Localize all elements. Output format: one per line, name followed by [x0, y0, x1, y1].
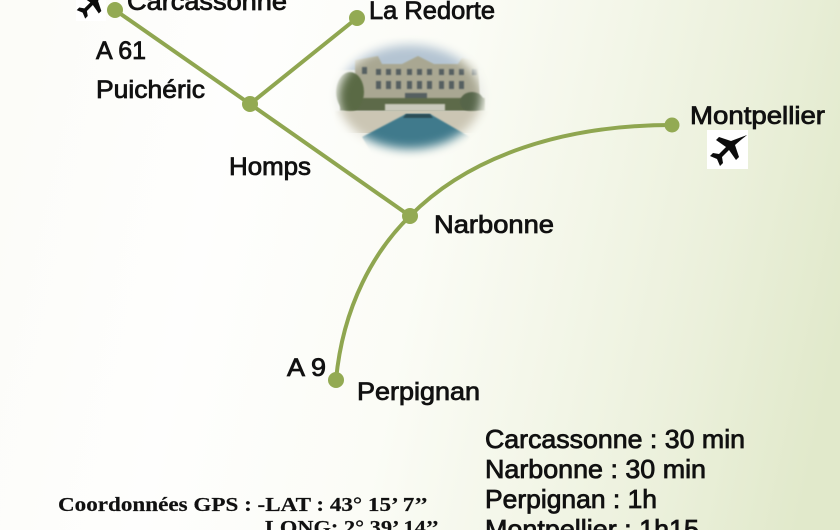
label: Puichéric: Puichéric: [96, 76, 205, 104]
GPS coordinates: Coordonnées GPS : -LAT : 43° 15’ 7’’: [58, 495, 428, 516]
travel times: Narbonne : 30 min: [485, 454, 706, 484]
label: Perpignan: Perpignan: [357, 378, 480, 406]
label: Homps: Homps: [229, 153, 311, 181]
icon: plane Montpellier: [707, 130, 748, 169]
travel times: Perpignan : 1h: [485, 484, 657, 514]
label: Montpellier: Montpellier: [690, 102, 825, 130]
road lines: [115, 10, 672, 380]
label: A 9: A 9: [287, 354, 326, 382]
travel times: Carcassonne : 30 min: [485, 424, 745, 454]
photo: chateau and pool: [335, 40, 486, 157]
GPS coordinates: [58, 495, 439, 530]
travel times: [485, 424, 745, 530]
label: A 61: A 61: [96, 37, 146, 65]
label: Narbonne: Narbonne: [434, 211, 554, 239]
icon: plane Carcassonne: [76, 0, 108, 21]
road nodes: [107, 2, 680, 388]
